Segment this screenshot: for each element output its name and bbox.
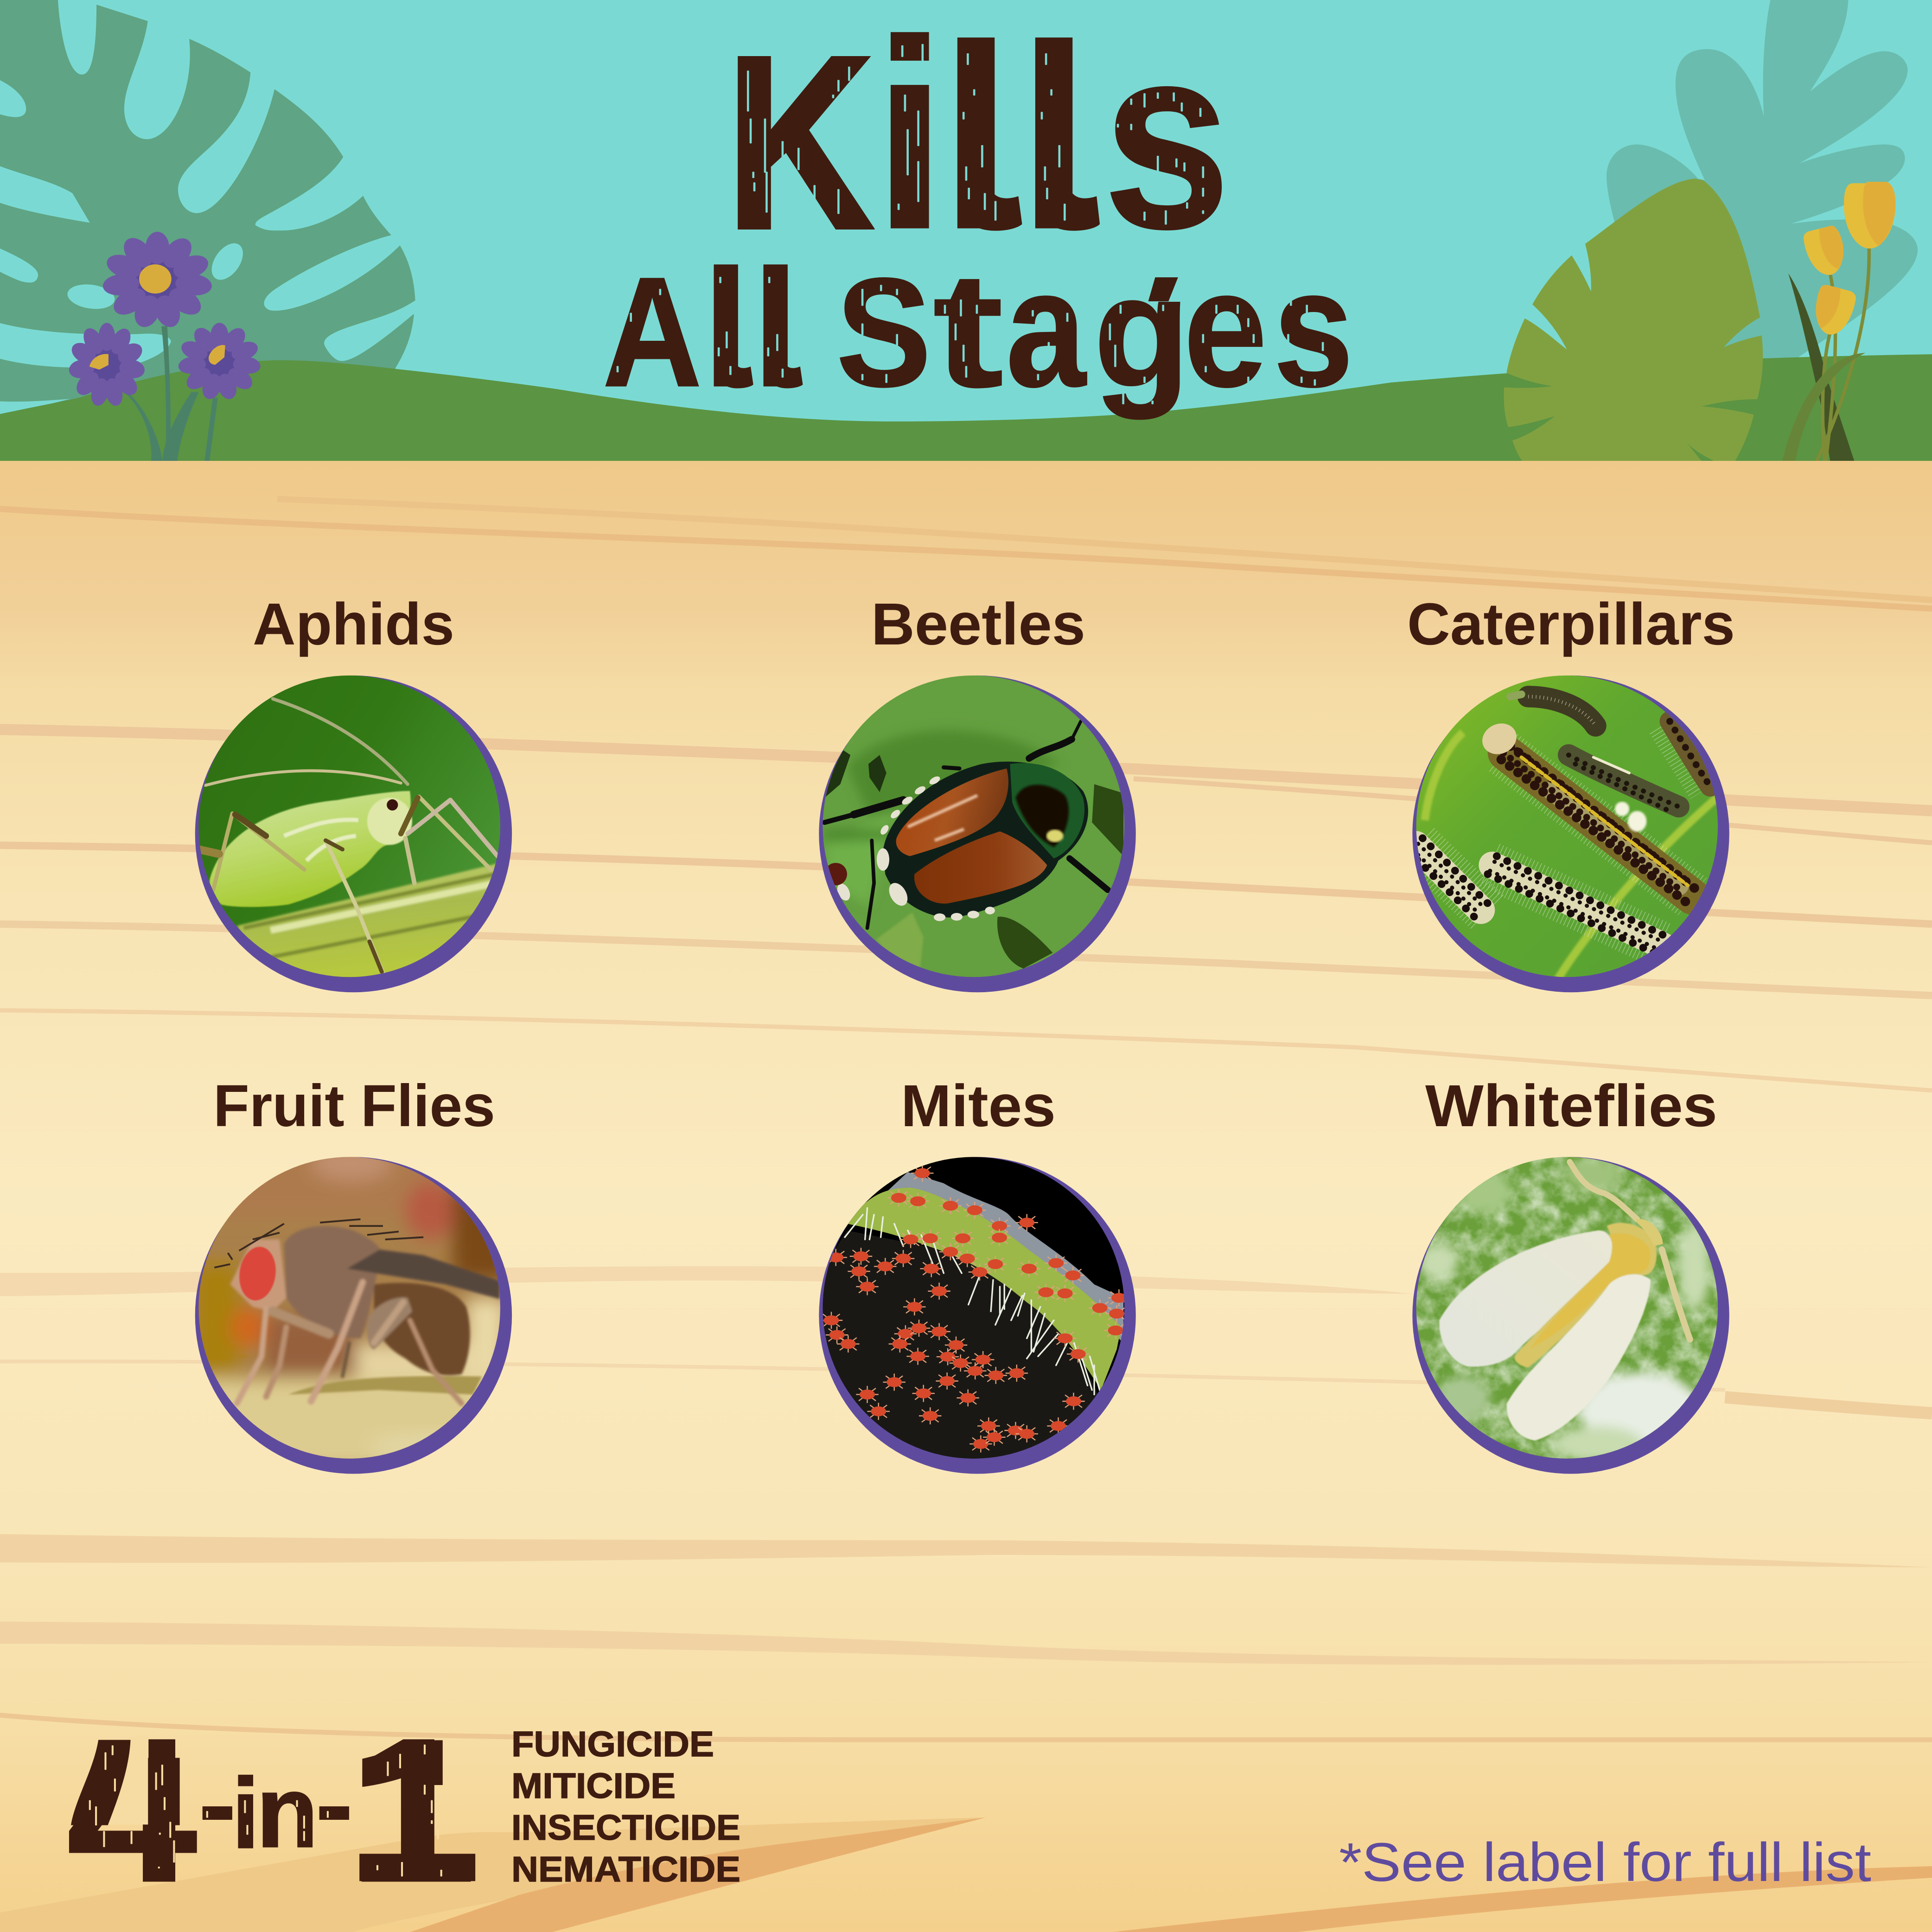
title: Kills All Stages (603, 32, 1354, 417)
title: Kills All Stages: a (1006, 236, 1086, 421)
title: Kills All Stages: K (726, 6, 873, 280)
product type list: FUNGICIDE (511, 1724, 714, 1764)
photo: aphid (195, 672, 512, 992)
label: Mites: Mites (901, 1073, 1056, 1139)
product type list: MITICIDE (511, 1766, 676, 1806)
large monstera leaf (0, 0, 415, 416)
photo: beetle (819, 672, 1136, 992)
title: Kills All Stages: s (1274, 236, 1353, 421)
title: Kills All Stages: e (1184, 236, 1267, 421)
label: Whiteflies: Whiteflies (1425, 1073, 1717, 1139)
photo: spider mites (816, 1154, 1136, 1474)
title: Kills All Stages: s (1103, 0, 1231, 283)
logo: 4-in-1: 1 (348, 1696, 477, 1925)
label: Aphids: Aphids (253, 591, 454, 657)
logo: 4-in-1: 4 (66, 1696, 198, 1925)
footnote: *See label for full list (1339, 1832, 1871, 1893)
logo: 4-in-1 (71, 1740, 475, 1881)
ground hill (0, 354, 1932, 464)
title: Kills All Stages: S (836, 246, 931, 419)
title: Kills All Stages: A (603, 245, 702, 419)
product type list (511, 1724, 740, 1889)
sky (0, 0, 1932, 464)
photo: whitefly (1412, 1154, 1729, 1474)
logo: 4-in-1: i (232, 1757, 260, 1869)
title: Kills All Stages: l (752, 236, 799, 421)
tulips (1782, 182, 1895, 463)
front green leaf (1504, 179, 1763, 463)
flower cluster left (68, 232, 261, 461)
photo: caterpillars (1409, 672, 1729, 992)
back leaf right (1607, 0, 1918, 367)
title: Kills All Stages: g (1094, 243, 1190, 420)
logo: 4-in-1: n (256, 1756, 318, 1868)
product type list: NEMATICIDE (511, 1849, 740, 1889)
label: Caterpillars: Caterpillars (1407, 591, 1735, 657)
title: Kills All Stages: l (703, 236, 749, 421)
label: Fruit Flies: Fruit Flies (213, 1073, 495, 1139)
logo: 4-in-1: - (316, 1748, 353, 1861)
product type list: INSECTICIDE (511, 1808, 740, 1848)
photo: fruit fly (194, 1145, 512, 1474)
logo: 4-in-1: - (199, 1748, 236, 1861)
label: Beetles: Beetles (871, 591, 1085, 657)
title: Kills All Stages: t (933, 238, 1003, 421)
wooden sand ground (0, 461, 1932, 1932)
